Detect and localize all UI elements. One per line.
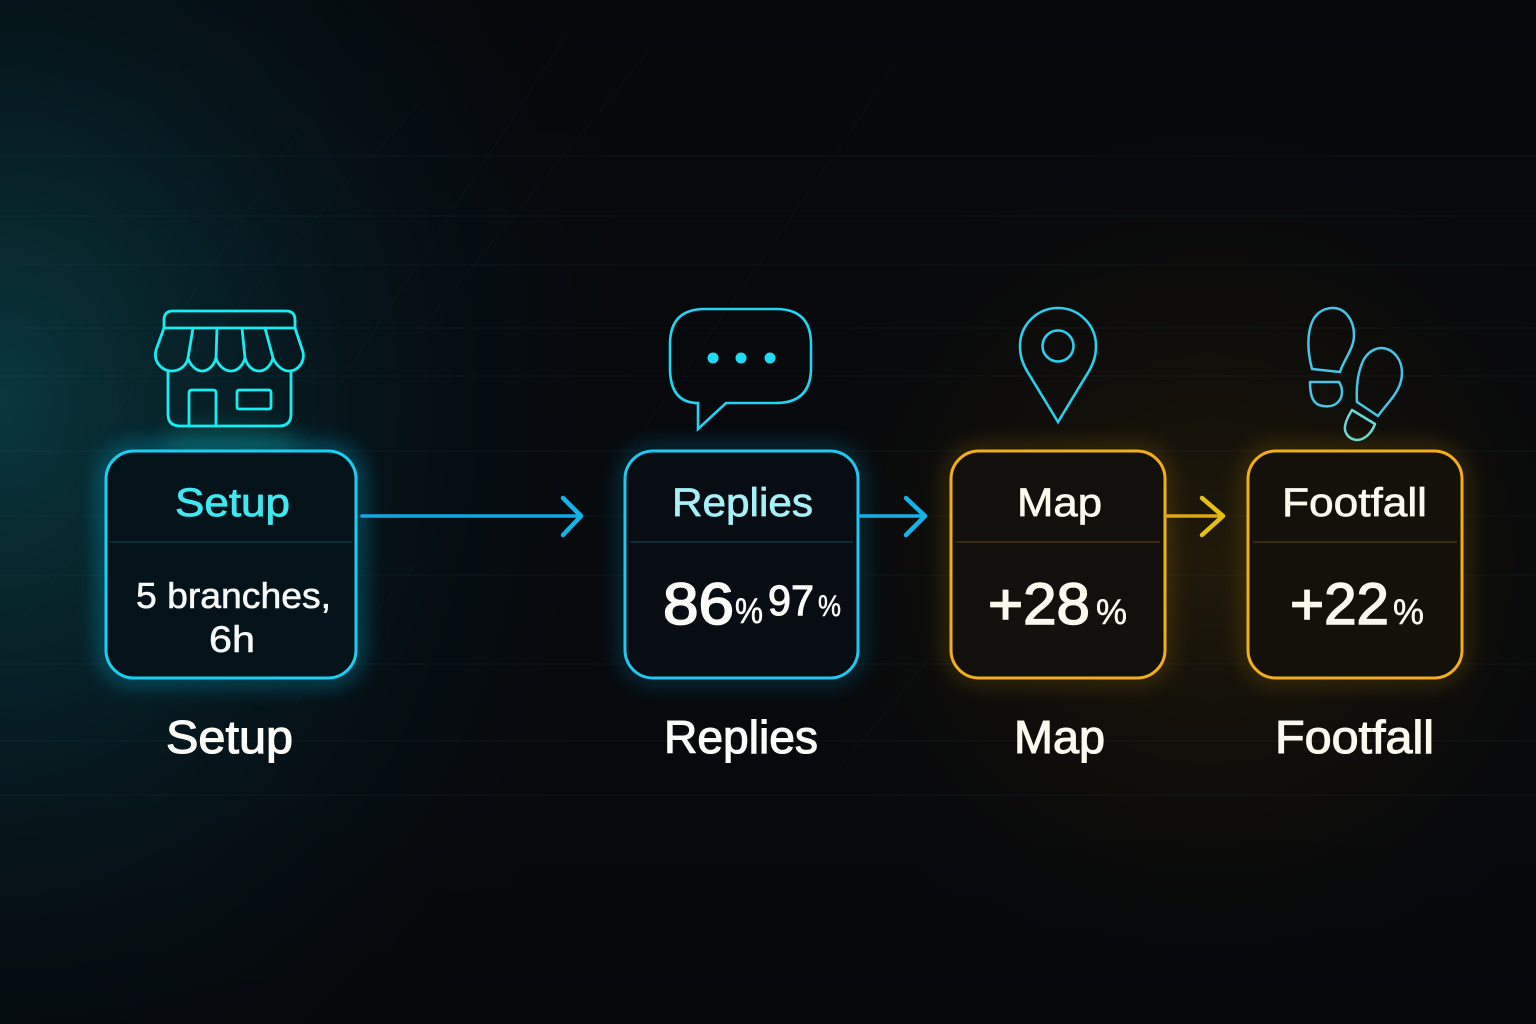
card heading: Replies: Replies (672, 481, 813, 525)
icon: map pin (1020, 308, 1096, 422)
arrow: Replies to Map (860, 498, 925, 535)
values: 86% and 97%: % (735, 592, 763, 631)
value: 5 branches, 6h (136, 575, 331, 660)
label: Footfall: Footfall (1275, 711, 1434, 763)
value: 5 branches, 6h: 6h (209, 619, 255, 660)
value: +28%: +28 (988, 572, 1090, 637)
values: 86% and 97% (663, 572, 841, 637)
label: Replies: Replies (664, 711, 818, 763)
card heading: Setup: Setup (175, 481, 290, 525)
values: 86% and 97%: % (818, 590, 841, 623)
card: Setup (106, 451, 356, 678)
value: +28%: % (1096, 593, 1127, 632)
card: Footfall (1248, 451, 1462, 678)
card: Replies (625, 451, 858, 678)
icon: speech bubble (670, 309, 811, 429)
card heading: Map: Map (1017, 481, 1102, 525)
step: Footfall (1248, 308, 1462, 763)
arrow: Setup to Replies (358, 498, 581, 535)
step: Map (951, 308, 1165, 763)
label: Map: Map (1014, 711, 1105, 763)
arrow: Map to Footfall (1166, 498, 1223, 535)
value: +22%: +22 (1290, 572, 1389, 637)
icon: storefront (155, 311, 303, 426)
value: 5 branches, 6h: 5 branches, (136, 575, 331, 616)
step: Setup (106, 311, 356, 763)
label: Setup: Setup (166, 711, 293, 763)
values: 86% and 97%: 97 (768, 577, 814, 625)
card: Map (951, 451, 1165, 678)
value: +22%: % (1393, 593, 1424, 632)
step: Replies (625, 309, 858, 763)
icon: footprints (1308, 308, 1402, 440)
card heading: Footfall: Footfall (1282, 481, 1427, 525)
values: 86% and 97%: 86 (663, 572, 734, 637)
